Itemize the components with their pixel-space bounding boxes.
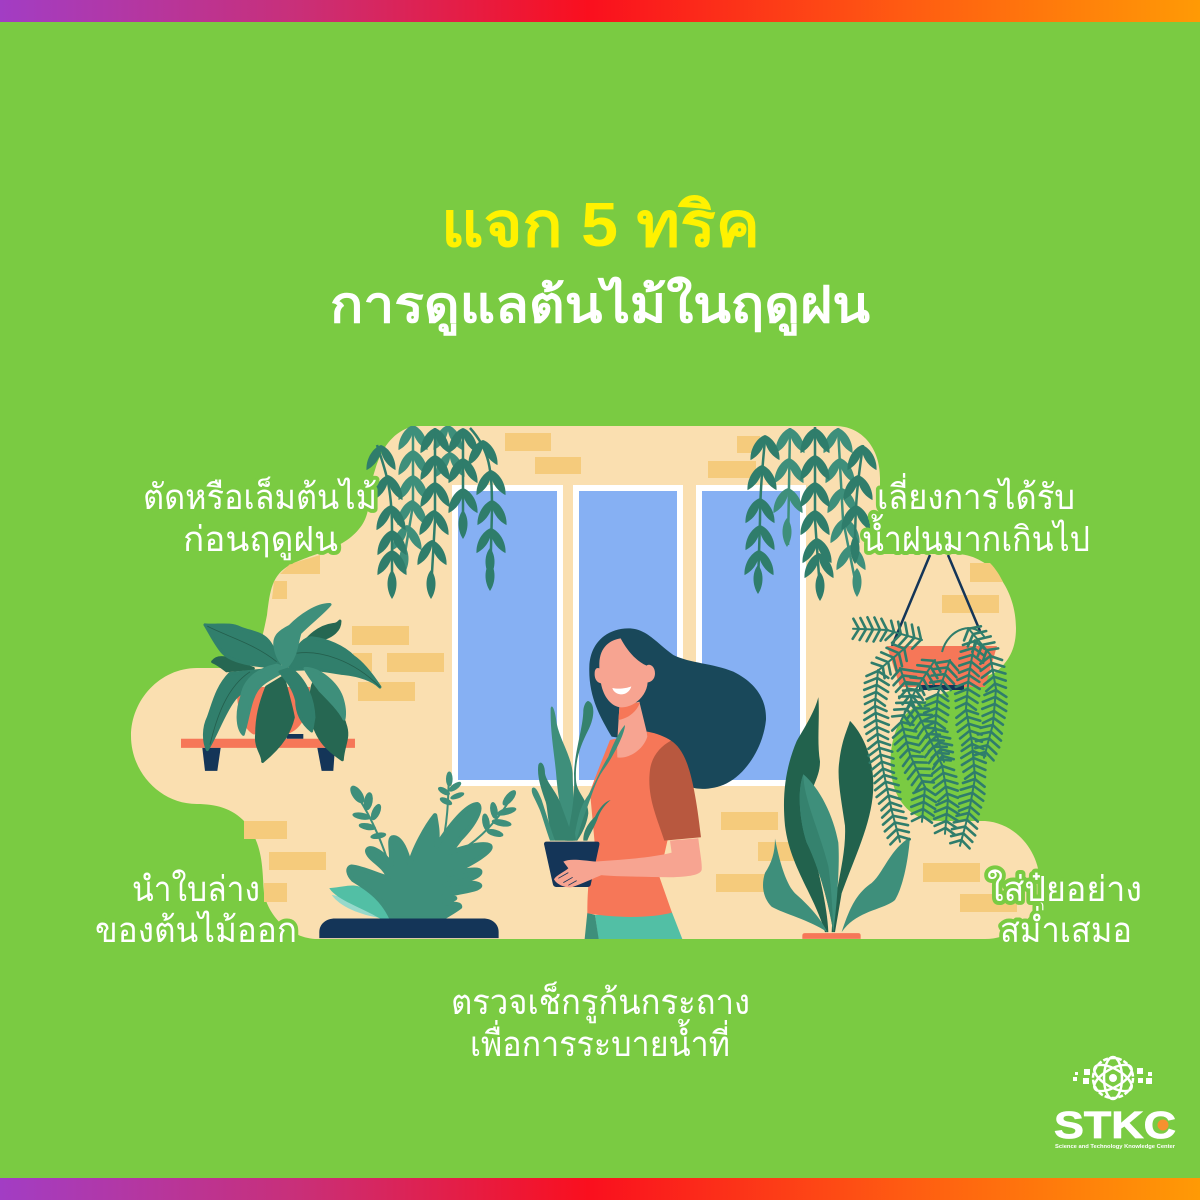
shelf (181, 739, 355, 771)
title (330, 191, 870, 336)
basket (887, 646, 997, 690)
neck (617, 702, 647, 758)
label: remove lower leaves: ของต้นไม้ออก (95, 910, 297, 950)
label: prune before rainy season (143, 476, 377, 560)
label: fertilize regularly (987, 869, 1142, 950)
label: remove lower leaves (95, 869, 297, 950)
atom icon (1090, 1057, 1136, 1099)
hand (554, 860, 602, 887)
title: แจก 5 ทริค (441, 191, 760, 260)
label: fertilize regularly: สม่ำเสมอ (1000, 906, 1132, 950)
pale leaves (332, 895, 383, 919)
label: check pot drainage: ตรวจเช็กรูก้นกระถาง (451, 981, 750, 1023)
woman holding plant (532, 628, 766, 939)
label: fertilize regularly: ใส่ปุ๋ยอย่าง (987, 869, 1142, 910)
label: prune before rainy season: ตัดหรือเล็มต้นไม้ (143, 476, 377, 517)
sprig leaves (347, 772, 518, 863)
brick pattern (244, 433, 1017, 912)
tall potted plant (763, 697, 910, 939)
shirt (587, 732, 677, 917)
logo: STKC (1054, 1057, 1176, 1150)
floor plant (319, 772, 518, 938)
arm (593, 838, 702, 877)
label: check pot drainage: เพื่อการระบายน้ำที่ (470, 1018, 730, 1064)
shelf plant (181, 605, 380, 771)
bottom gradient bar (0, 1178, 1200, 1200)
fern leaves (204, 605, 380, 761)
terracotta pot (237, 687, 310, 734)
pants (585, 912, 682, 939)
hanging vines left (363, 423, 510, 599)
logo dots (1073, 1068, 1152, 1084)
title: การดูแลต้นไม้ในฤดูฝน (330, 276, 870, 336)
tagline: Science and Technology Knowledge Center (1055, 1144, 1176, 1150)
navy planter (319, 919, 499, 938)
hanging vines right (741, 426, 880, 601)
label: remove lower leaves: นำใบล่าง (132, 869, 260, 909)
main leaves (349, 804, 490, 919)
label: avoid too much rain: น้ำฝนมากเกินไป (862, 513, 1090, 559)
pot (544, 842, 599, 887)
smile (612, 686, 631, 694)
window (452, 485, 806, 786)
label: avoid too much rain (862, 473, 1090, 559)
illustration: cream wall blob (131, 426, 1040, 939)
hanging basket with fern (853, 555, 1008, 849)
label: prune before rainy season: ก่อนฤดูฝน (183, 520, 338, 560)
label: check pot drainage (451, 981, 750, 1064)
held plant leaves (532, 701, 625, 841)
hair (589, 628, 766, 789)
sleeve (649, 741, 701, 841)
ropes (892, 555, 980, 646)
top gradient bar (0, 0, 1200, 22)
fern fronds (853, 617, 1008, 849)
wordmark: STKC (1054, 1105, 1176, 1147)
face (595, 638, 655, 707)
label: avoid too much rain: เลี่ยงการได้รับ (877, 473, 1075, 517)
